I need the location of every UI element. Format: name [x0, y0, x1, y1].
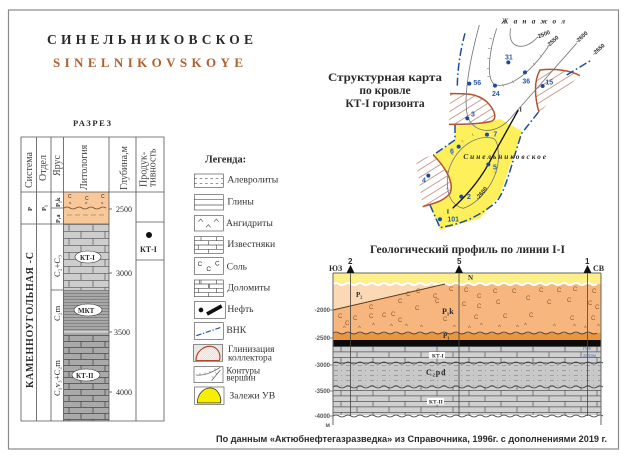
layer: P2 wedge [333, 284, 445, 310]
line end labels: I [519, 107, 522, 114]
salt symbols: ^ [405, 324, 408, 330]
salt symbols: C [353, 316, 358, 322]
well labels: 2 [348, 257, 353, 266]
layer labels: P₁k [442, 307, 454, 316]
salt symbols: ^ [516, 325, 519, 331]
legend: dolomites [194, 280, 271, 297]
lithology column [64, 192, 109, 421]
salt symbols: C [573, 287, 578, 293]
legend: oil [194, 302, 254, 318]
contour values: -2500 [535, 30, 551, 41]
layer tags [427, 352, 445, 406]
depth scale: 2500 [116, 205, 132, 214]
salt symbols: C [398, 299, 403, 305]
legend: hydrocarbon deposits: Залежи УВ [229, 391, 275, 402]
salt symbols: ^ [468, 326, 471, 332]
salt symbols: C [570, 316, 575, 322]
layer: KT-I limestone [333, 346, 601, 364]
salt symbols: ^ [553, 324, 556, 330]
system and stage labels [25, 197, 62, 396]
system and stage labels: КАМЕННОУГОЛЬНАЯ -С [25, 252, 36, 388]
panel: structural map: Синельниковское [463, 152, 547, 161]
contact depth note: ГНК [583, 346, 592, 351]
layer labels [356, 274, 473, 377]
legend: clays: Глины [227, 197, 254, 208]
horizon labels: КТ-II [76, 372, 94, 380]
salt symbols: C [345, 321, 350, 327]
salt symbols: C [464, 288, 469, 294]
legend: salt: Соль [227, 261, 248, 272]
panel: geological profile [315, 257, 605, 429]
salt symbols: C [512, 289, 517, 295]
legend: anhydrites [194, 216, 273, 231]
layer labels: N [468, 274, 473, 282]
column headings: Глубина,м [119, 145, 130, 190]
salt symbols: C [435, 299, 440, 305]
column headings: Отдел [38, 155, 49, 181]
structure contours [447, 25, 577, 208]
salt symbols: ^ [584, 326, 587, 332]
productivity marker [140, 232, 157, 254]
horizon labels: МКТ [78, 307, 95, 315]
salt symbols: C [443, 317, 448, 323]
well numbers: 7 [493, 132, 497, 139]
panel: legend [193, 154, 279, 404]
column headings [24, 144, 158, 190]
legend: limestone: Известняки [227, 239, 275, 250]
well numbers: 56 [473, 80, 481, 87]
salt symbols: C [338, 314, 343, 320]
salt symbols: C [595, 305, 600, 311]
legend: limestone [194, 237, 275, 253]
salt symbols: C [557, 288, 562, 294]
column headings: Ярус [52, 154, 63, 176]
well numbers: 2 [467, 194, 471, 201]
salt symbols: C [415, 306, 420, 312]
lithology column: ^ [85, 202, 88, 208]
field names: Жанажол [501, 16, 565, 25]
depth axis: м [326, 423, 331, 429]
column grid [21, 137, 164, 421]
layer: C2pd [333, 363, 601, 387]
legend: dolomites: Доломиты [227, 282, 271, 293]
salt symbols: ^ [498, 325, 501, 331]
well labels: ЮЗ [329, 264, 342, 273]
well labels [329, 257, 605, 273]
horizon labels [72, 251, 102, 381]
well numbers: 3 [471, 112, 475, 119]
title: Russian field name: СИНЕЛЬНИКОВСКОЕ [47, 32, 253, 47]
depth axis: -2500 [315, 336, 331, 342]
productivity marker: КТ-I [140, 245, 157, 254]
salt symbols: C [369, 314, 374, 320]
column headings: Литология [79, 144, 90, 190]
salt symbols: C [526, 296, 531, 302]
salt symbols: C [416, 289, 421, 295]
legend: oil: Нефть [227, 304, 254, 315]
salt symbols: C [477, 294, 482, 300]
system and stage labels: P₁k [55, 197, 62, 207]
depth axis: -2000 [315, 308, 331, 314]
well numbers: 6 [450, 148, 454, 155]
salt symbols: C [369, 305, 374, 311]
legend: salt: C [198, 261, 203, 268]
well markers [346, 265, 592, 273]
system and stage labels: P [27, 207, 34, 211]
salt symbols: C [496, 300, 501, 306]
salt symbols: ^ [343, 326, 346, 332]
salt symbols: C [567, 298, 572, 304]
layer: oil [333, 340, 601, 346]
panel: stratigraphic column [21, 137, 164, 421]
heading: structural map [328, 72, 442, 110]
depth axis: -3500 [315, 389, 331, 395]
salt symbols: ^ [420, 325, 423, 331]
legend: reservoir clay-out: Глинизация [228, 345, 275, 355]
well numbers: 36 [522, 79, 530, 86]
clay-out boundaries [423, 69, 580, 207]
layer boundaries [333, 283, 603, 417]
legend: water-oil contact [194, 323, 247, 339]
depth scale: 3500 [114, 328, 130, 337]
panel: structural map [416, 16, 606, 230]
legend: water-oil contact: ВНК [226, 325, 247, 336]
clay-out zone: east [535, 69, 580, 112]
heading: geological profile: Геологический профиль по линии I-I [370, 242, 565, 256]
salt symbols: ^ [524, 323, 527, 329]
wells [426, 60, 545, 221]
horizon labels: КТ-I [80, 254, 95, 262]
salt symbols: C [477, 304, 482, 310]
salt symbols: C [449, 287, 454, 293]
contour values: -2600 [475, 186, 489, 201]
well labels: 1 [585, 257, 590, 266]
legend: clays [194, 195, 254, 210]
legend: siltstone [194, 174, 279, 187]
well numbers: 4 [422, 177, 426, 184]
legend: salt: C [206, 266, 211, 273]
salt symbols: C [547, 300, 552, 306]
heading: structural map: по кровле [359, 85, 411, 97]
well numbers: 101 [447, 217, 459, 224]
layer: Neogene [333, 273, 601, 284]
legend: top contours: Контуры [226, 365, 260, 375]
lithology column: C [85, 196, 89, 202]
legend: salt: C [215, 260, 220, 267]
salt symbols: C [529, 313, 534, 319]
system and stage labels: P₁a [56, 215, 62, 223]
layer labels: P₁ [443, 332, 449, 340]
line end labels [447, 107, 522, 215]
contour values: -2600 [575, 31, 589, 45]
salt symbols: C [539, 288, 544, 294]
salt symbols: ^ [573, 324, 576, 330]
well numbers [422, 54, 553, 224]
legend: top contours [194, 365, 260, 383]
salt symbols: C [406, 292, 411, 298]
layer tags: КТ-II [429, 400, 443, 406]
legend: anhydrites: Ангидриты [226, 218, 273, 229]
salt symbols [338, 287, 600, 332]
layer labels: C₂pd [426, 368, 446, 377]
salt symbols: C [592, 289, 597, 295]
contour values: -2650 [592, 43, 606, 57]
salt symbols: C [382, 313, 387, 319]
lithology column: C [68, 194, 72, 200]
system and stage labels: C₂+C₃ [52, 255, 62, 277]
system and stage labels: C₁v₃+C₂m [52, 360, 62, 396]
salt symbols: ^ [597, 324, 600, 330]
salt symbols: C [474, 315, 479, 321]
heading: structural map: КТ-I горизонта [345, 98, 425, 110]
legend: salt [194, 258, 248, 274]
salt symbols: C [588, 301, 593, 307]
contact depth note [583, 346, 596, 358]
salt symbols: C [433, 294, 438, 300]
layer: kungur salt [333, 284, 601, 340]
salt symbols: C [503, 314, 508, 320]
source note: По данным «Актюбнефтегазразведка» из Справочника, 1996г. с дополнениями 2019 г. [216, 434, 607, 444]
lithology column: ^ [101, 202, 104, 208]
frame sides [333, 273, 601, 425]
layer tags: КТ-I [432, 354, 444, 360]
clay-out zone: north [449, 93, 494, 124]
legend: reservoir clay-out [193, 345, 275, 364]
well numbers: 31 [505, 54, 513, 61]
contour values: -2550 [546, 35, 560, 49]
legend: siltstone: Алевролиты [227, 174, 279, 185]
contour hachures [446, 38, 542, 207]
system and stage labels: C₂m [52, 305, 62, 321]
contour values [475, 30, 606, 201]
well columns [350, 273, 588, 416]
column headings: Система [24, 151, 35, 188]
column headings: Продук- [138, 152, 150, 187]
deposit area [430, 119, 522, 230]
heading: structural map: Структурная карта [328, 72, 442, 84]
well numbers: 15 [545, 79, 553, 86]
salt symbols: ^ [453, 325, 456, 331]
title: Latin field name: SINELNIKOVSKOYE [53, 55, 243, 70]
system and stage labels: P₁ [41, 205, 48, 211]
salt symbols: ^ [390, 324, 393, 330]
layer labels: P₂ [356, 291, 362, 299]
line end labels: I [447, 208, 450, 215]
profile line I-I [453, 110, 518, 208]
salt symbols: ^ [372, 323, 375, 329]
legend: top contours: вершин [226, 373, 256, 383]
heading: section: РАЗРЕЗ [73, 118, 112, 128]
legend heading: Легенда: [205, 154, 246, 165]
depth axis [315, 308, 333, 429]
well numbers: 5 [493, 165, 497, 172]
depth axis: -3000 [315, 363, 331, 369]
well labels: 5 [457, 257, 462, 266]
layer: KT-II limestone [333, 387, 601, 415]
water-oil contact [430, 33, 592, 228]
salt symbols: C [462, 302, 467, 308]
lithology column: ^ [69, 202, 72, 208]
legend: hydrocarbon deposits [195, 387, 275, 404]
depth scale: 3000 [116, 269, 132, 278]
depth scale: 4000 [116, 388, 132, 397]
salt symbols: C [493, 289, 498, 295]
depth axis: -4000 [315, 414, 331, 420]
legend: reservoir clay-out: коллектора [228, 354, 273, 364]
column headings: тивность [148, 148, 158, 187]
salt symbols: ^ [480, 323, 483, 329]
salt symbols: ^ [358, 326, 361, 332]
salt symbols: C [391, 312, 396, 318]
well labels: СВ [593, 264, 605, 273]
depth scale [109, 205, 132, 397]
clay-out zone: west [416, 155, 451, 207]
well numbers: 24 [492, 91, 500, 98]
lithology column: C [101, 194, 105, 200]
layer: P1a [333, 333, 601, 340]
salt symbols: C [398, 318, 403, 324]
contact depth note: 2650м [583, 353, 596, 358]
salt symbols: C [591, 316, 596, 322]
